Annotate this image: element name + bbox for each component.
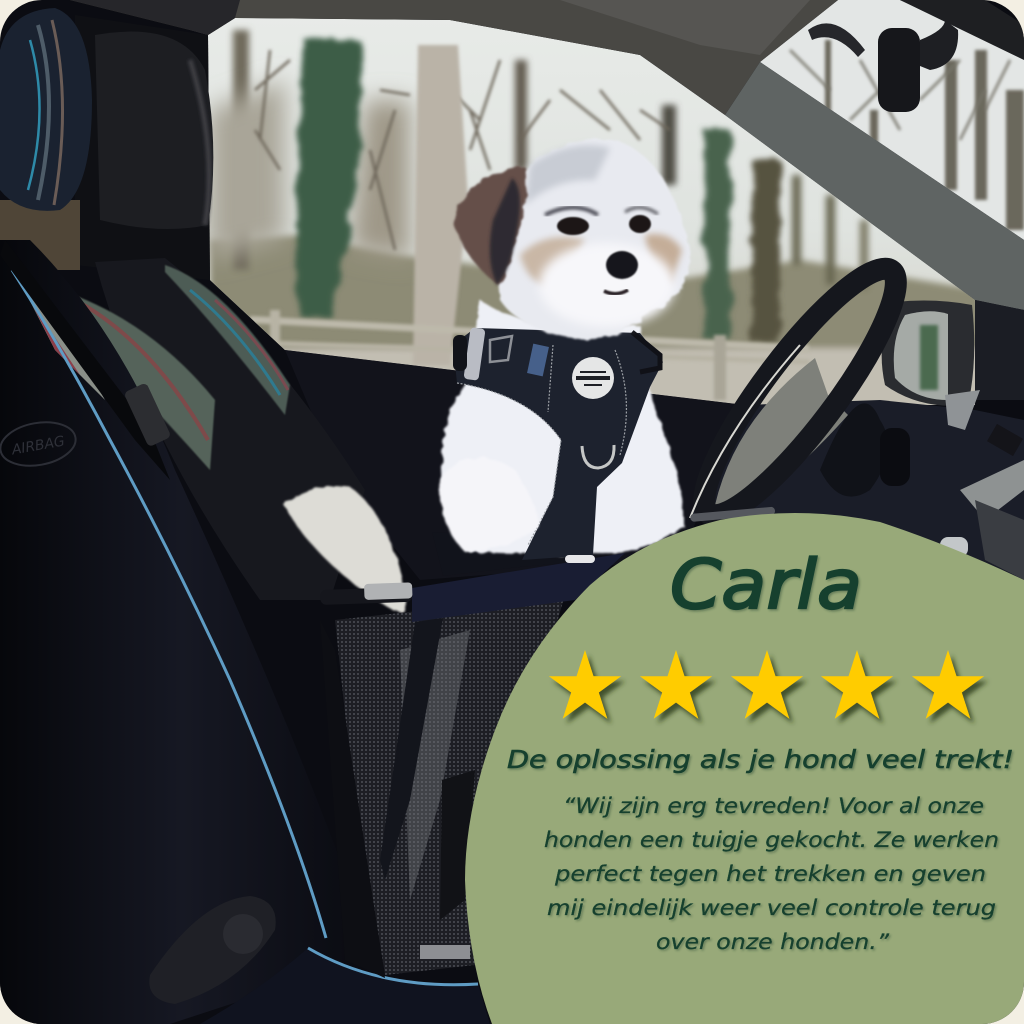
name heading: Carla <box>670 546 862 625</box>
review quote: perfect tegen het trekken en geven <box>554 862 986 887</box>
dashboard vent controls <box>940 424 1024 580</box>
panel background <box>465 513 1024 1024</box>
dog legs and chest <box>432 300 684 576</box>
dog harness <box>453 327 663 560</box>
carrier mesh <box>335 595 565 975</box>
dashboard <box>690 400 1024 590</box>
interior door <box>285 350 745 580</box>
driver headrest <box>0 8 92 211</box>
background patch left <box>0 200 80 270</box>
seat adjust handle <box>149 896 276 1004</box>
seat airbag label: AIRBAG <box>10 433 66 459</box>
windshield view <box>750 0 1024 250</box>
review headline: De oplossing als je hond veel trekt! <box>507 745 1014 774</box>
testimonial panel <box>465 513 1024 1024</box>
steering wheel <box>689 258 910 524</box>
review quote: over onze honden.” <box>656 930 890 955</box>
dog tail <box>284 486 407 612</box>
seat airbag label <box>0 421 76 467</box>
review quote: mij eindelijk weer veel controle terug <box>547 896 996 921</box>
harness badge <box>572 357 614 399</box>
B pillar <box>208 37 210 278</box>
dog <box>432 139 690 576</box>
door mirror <box>882 300 1024 430</box>
rear headrest <box>95 32 213 229</box>
rear-view mirror <box>808 20 958 112</box>
carrier top bar <box>412 553 625 622</box>
side window view <box>200 10 1000 418</box>
driver seat <box>0 240 490 1024</box>
A pillar <box>725 62 1024 310</box>
review quote: honden een tuigje gekocht. Ze werken <box>544 828 999 853</box>
review quote <box>544 794 999 955</box>
passenger seat <box>79 258 344 600</box>
five-star rating <box>549 650 984 719</box>
dog left paw <box>437 474 540 554</box>
dog carrier <box>320 507 775 978</box>
dog head <box>453 139 690 339</box>
review quote: “Wij zijn erg tevreden! Voor al onze <box>563 794 984 819</box>
car ceiling <box>70 0 1024 115</box>
